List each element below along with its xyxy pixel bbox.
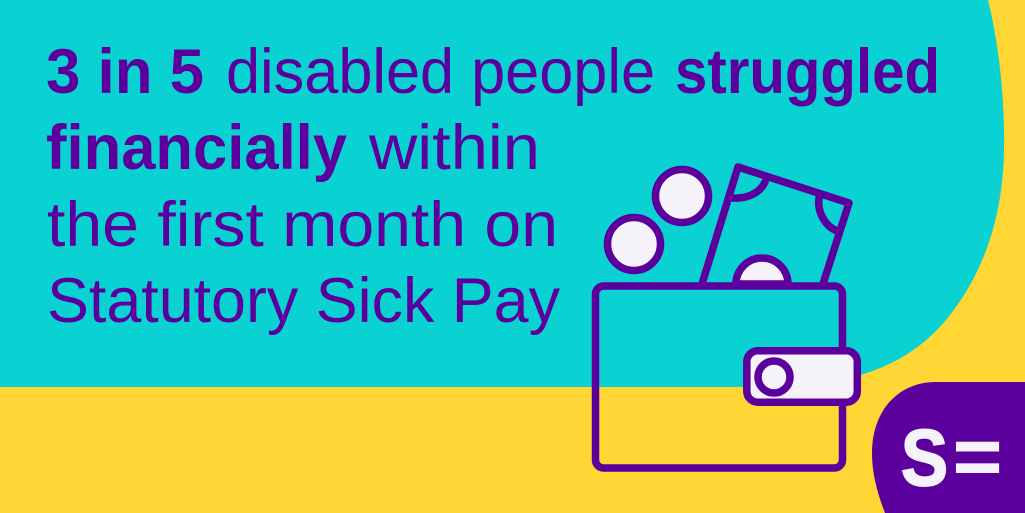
headline: struggled xyxy=(675,37,940,107)
icon: wallet with cash and coins xyxy=(596,167,857,468)
icon: coin upper xyxy=(656,170,708,222)
teal blob panel xyxy=(0,0,1004,387)
headline: financially xyxy=(46,113,347,183)
logo badge: = xyxy=(953,412,1002,501)
icon: wallet body xyxy=(596,286,842,468)
headline xyxy=(46,37,940,336)
logo text: S xyxy=(901,413,948,502)
icon: wallet clasp xyxy=(747,351,857,402)
headline: 3 in 5 xyxy=(46,37,204,107)
icon: banknote xyxy=(702,167,849,284)
icon: clasp button xyxy=(758,361,790,393)
headline: the first month on xyxy=(47,190,558,260)
logo badge xyxy=(872,382,1025,513)
headline: Statutory Sick Pay xyxy=(47,266,560,336)
headline: disabled people xyxy=(226,37,655,107)
headline: within xyxy=(368,113,540,183)
icon: coin lower xyxy=(608,218,660,270)
